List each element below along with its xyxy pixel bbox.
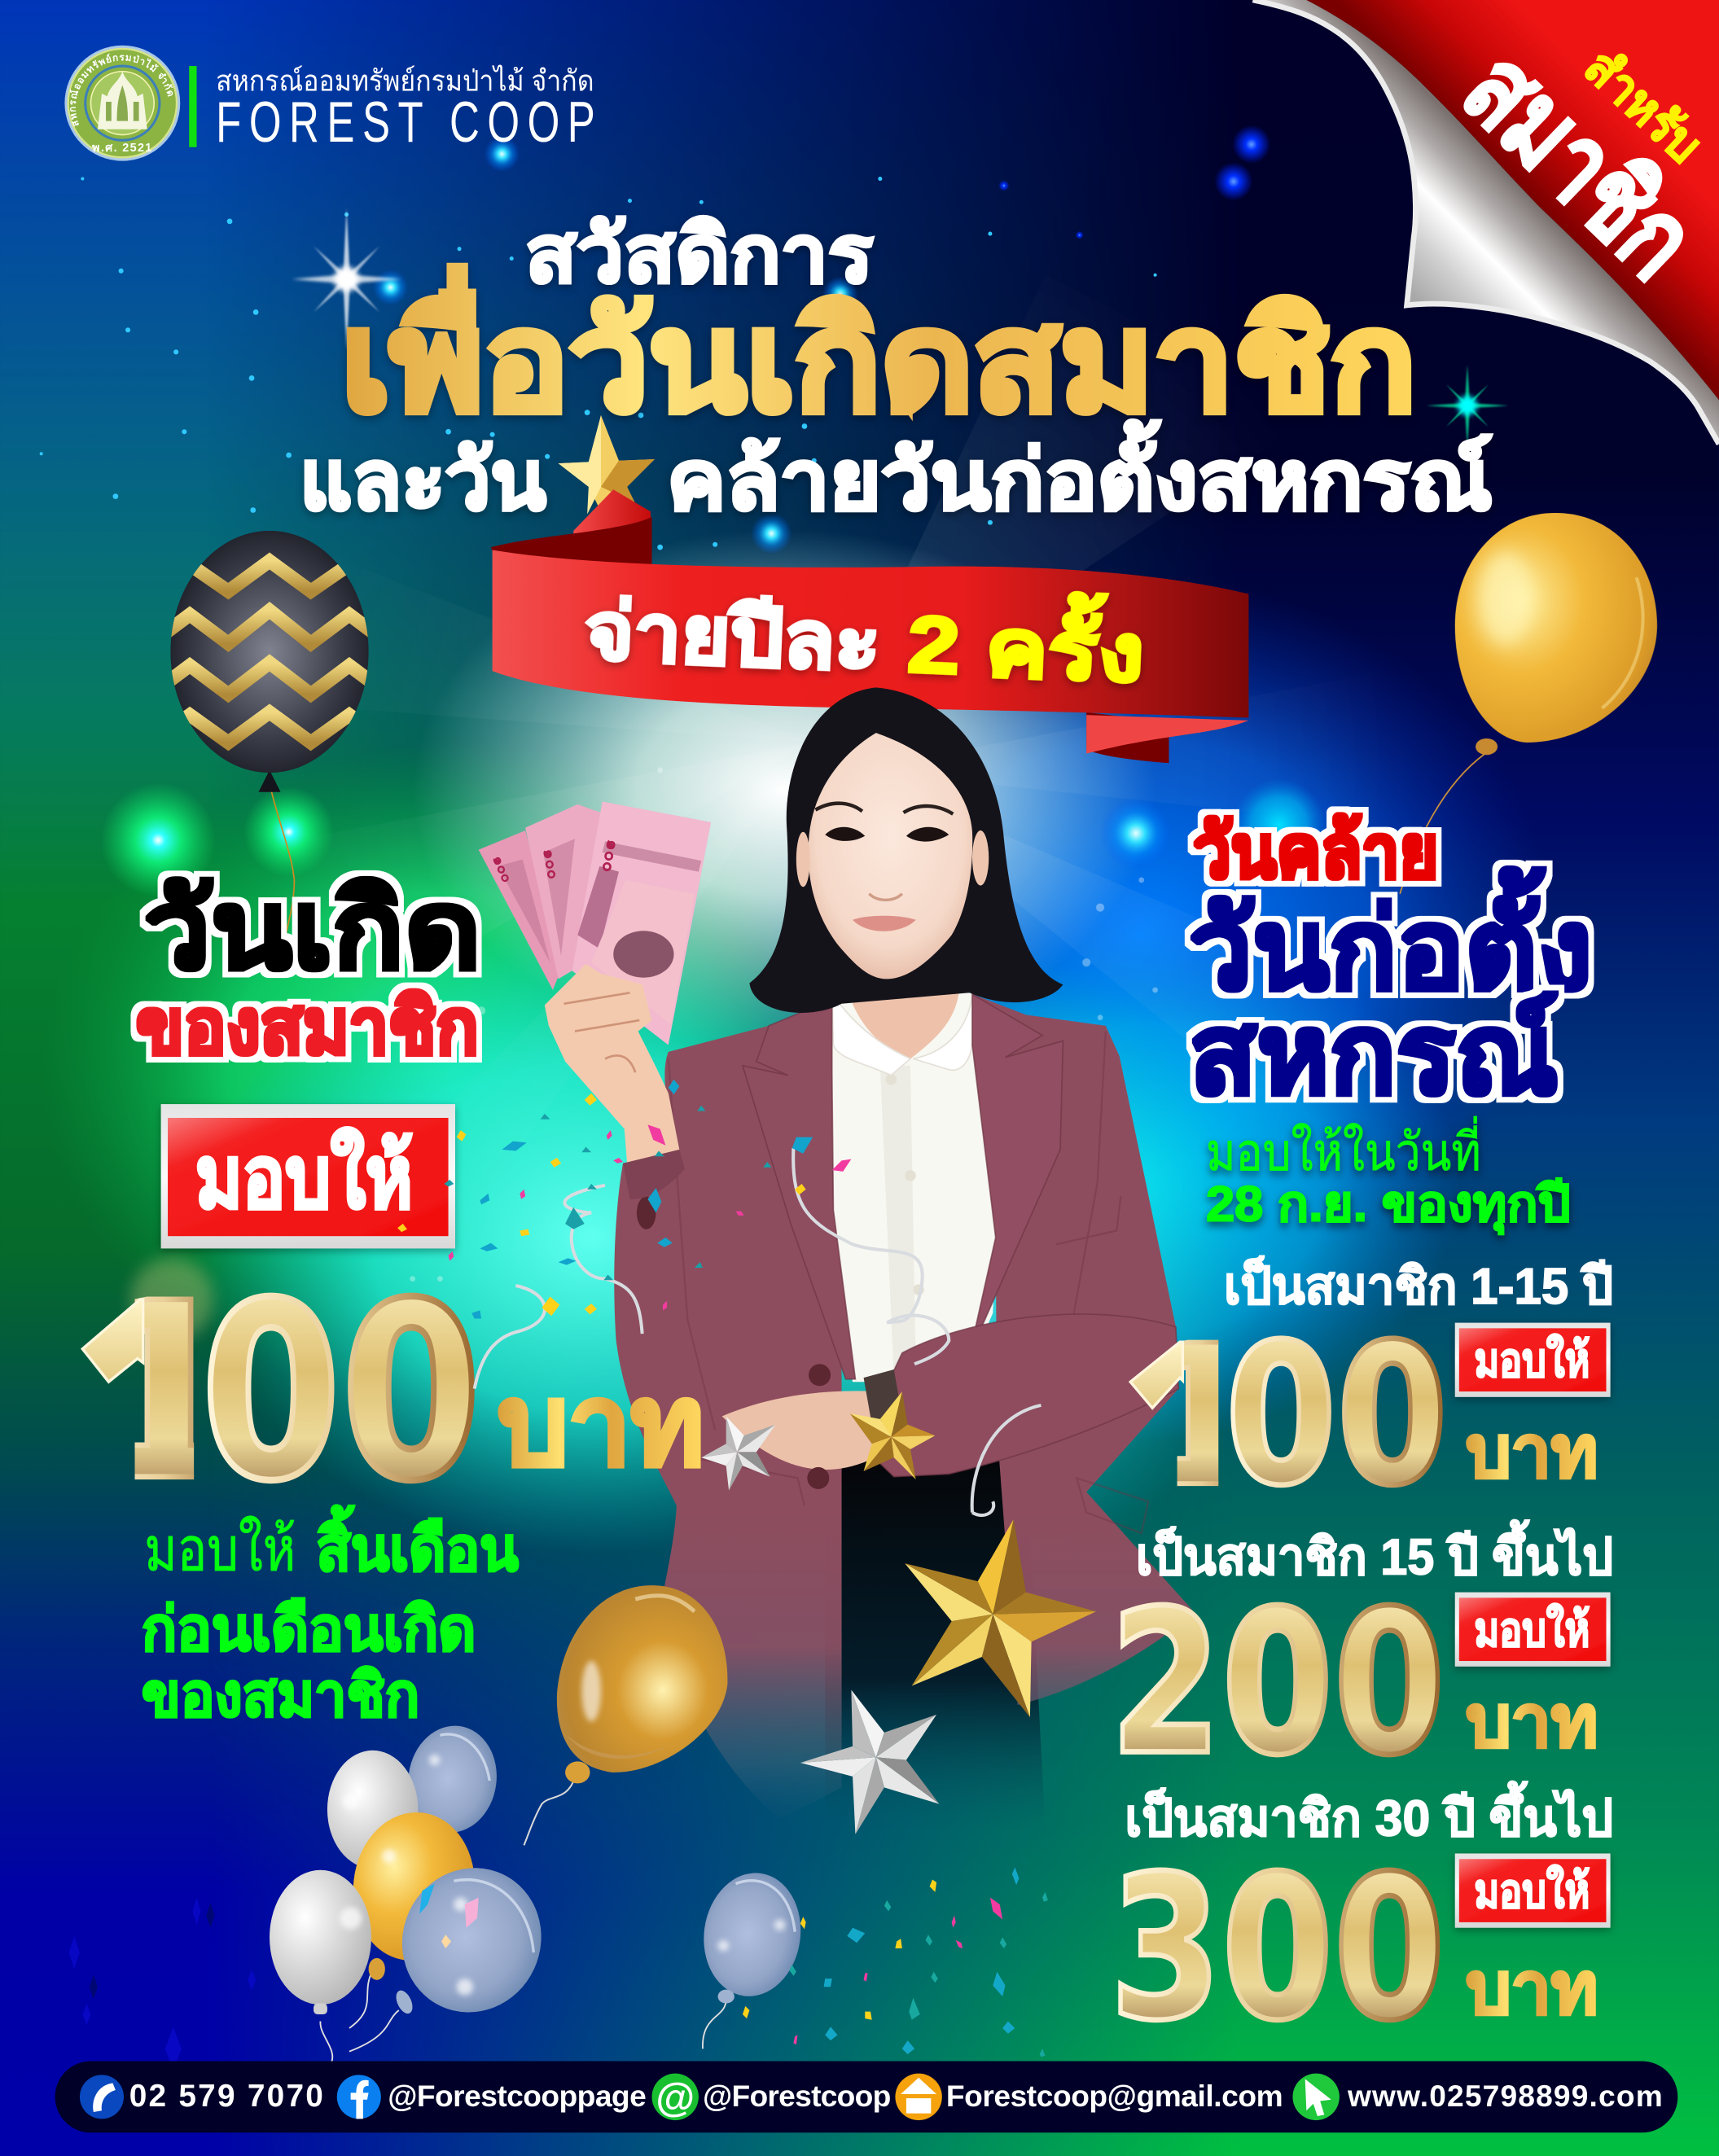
tier 2: 15+ years [1110, 1519, 1613, 1799]
title line 1: สวัสดิการ [525, 209, 873, 299]
starburst: white sparkle [280, 208, 413, 351]
page curl corner [1252, 0, 1719, 444]
tier 3: 30+ years: บาท [1466, 1948, 1598, 2028]
gold star: small on arm [850, 1391, 935, 1479]
tier 1 button [1455, 1323, 1611, 1397]
left note: ก่อนเดือนเกิด [142, 1596, 476, 1663]
title line 3 right: คล้ายวันก่อตั้งสหกรณ์ [667, 420, 1492, 527]
amount: 100 left [78, 1252, 481, 1535]
logo divider bar [189, 66, 197, 147]
contact: facebook: @Forestcooppage [388, 2079, 647, 2113]
tier 3: 30+ years: เป็นสมาชิก 30 ปี ขึ้นไป [1125, 1781, 1613, 1847]
woman holding banknotes [479, 687, 1194, 1829]
button: give [161, 1104, 455, 1248]
contact bar [55, 2061, 1677, 2132]
tier 2: 15+ years: เป็นสมาชิก 15 ปี ขึ้นไป [1136, 1519, 1613, 1586]
confetti around woman [397, 1080, 1041, 1515]
balloon cluster [270, 1720, 809, 2062]
logo: cooperative seal: พ.ศ. 2521 [92, 142, 153, 155]
gold star in title [559, 415, 655, 523]
balloon: large gold bottom [524, 1585, 727, 1845]
face [809, 733, 972, 979]
contact: phone: 02 579 7070 [129, 2079, 323, 2114]
left note [142, 1505, 519, 1729]
left note: มอบให้ [144, 1516, 296, 1584]
tier 3: 30+ years: 300 [1110, 1834, 1445, 2064]
ribbon banner [491, 489, 1248, 763]
jacket buttons [809, 1364, 831, 1386]
collar left [832, 993, 910, 1076]
ribbon text: จ่ายปีละ [583, 585, 882, 687]
right note: 28 ก.ย. ของทุกปี [1206, 1177, 1571, 1235]
title line 3 left: และวัน [300, 435, 546, 527]
icon: cursor [1292, 2074, 1340, 2120]
heading: of members: ของสมาชิก [136, 984, 479, 1071]
tier 1 amount 100: 1 [1134, 1304, 1268, 1530]
sleeve cuff button [637, 1196, 656, 1229]
title line 2: gold: เพื่อวันเกิดสมาชิก [341, 265, 1416, 439]
tier 2 button [1455, 1593, 1611, 1667]
button: give: มอบให้ [195, 1128, 413, 1226]
balloon: black and gold zigzag [170, 531, 369, 933]
ears [796, 830, 989, 887]
amount: 100 left: 00 [201, 1252, 481, 1535]
right forearm across body [860, 1314, 1178, 1477]
tier 3 button [1455, 1853, 1611, 1928]
banknotes: ๑๐๐ [598, 838, 624, 874]
tier 1 amount 100 [1129, 1335, 1443, 1488]
jacket body left [614, 1000, 842, 1819]
gold star: large [905, 1519, 1096, 1717]
banknotes: ๑๐๐ [489, 852, 516, 885]
collar right [913, 990, 972, 1070]
amount label: baht left: บาท [498, 1364, 704, 1489]
lapel left [743, 1000, 855, 1379]
tier 2: 15+ years: บาท [1466, 1682, 1598, 1762]
left note: สิ้นเดือน [316, 1505, 519, 1584]
logo: cooperative seal [64, 46, 181, 161]
left note: ของสมาชิก [142, 1662, 419, 1729]
confetti bottom [743, 1867, 1048, 2057]
amount: 100 left: 1 [78, 1252, 248, 1535]
heading: anniversary line 2: วันก่อตั้ง [1190, 867, 1593, 1013]
tier 2 button: มอบให้ [1474, 1602, 1590, 1656]
contact: email: Forestcoop@gmail.com [946, 2079, 1283, 2113]
raised hand [545, 964, 679, 1181]
heading: anniversary line 1: วันคล้าย [1194, 810, 1438, 893]
icon: phone [80, 2075, 124, 2119]
right heading [1190, 810, 1593, 1118]
ribbon text: 2 ครั้ง [906, 585, 1147, 699]
banknotes [479, 802, 711, 1045]
tier 1: 1-15 years: เป็นสมาชิก 1-15 ปี [1224, 1255, 1613, 1315]
tier 1 amount 100: 00 [1226, 1303, 1448, 1528]
ribbons [475, 1148, 1041, 1515]
banknotes: ๑๐๐ [539, 848, 562, 881]
tier 2: 15+ years: 200 [1110, 1568, 1445, 1799]
pants [825, 1430, 1045, 1829]
watch [864, 1369, 902, 1425]
tier 3: 30+ years [1110, 1781, 1613, 2064]
tier 3 button: มอบให้ [1474, 1864, 1590, 1917]
neck [843, 956, 960, 1058]
hand on arm [722, 1391, 894, 1470]
silver star: large [800, 1690, 939, 1834]
contact: line: @Forestcoop [703, 2079, 891, 2113]
starburst: teal sparkle [1424, 363, 1510, 449]
hair [749, 687, 1063, 1013]
icon: facebook [337, 2075, 381, 2119]
heading: birthday: วันเกิด [144, 869, 481, 992]
right note: มอบให้ในวันที่ [1206, 1116, 1481, 1181]
lapel right [970, 994, 1063, 1354]
ribbon text [583, 572, 1147, 699]
tier 1: 1-15 years [1129, 1255, 1614, 1488]
corner label: for members: สำหรับ [1574, 39, 1712, 173]
contact: website: www.025798899.com [1347, 2079, 1663, 2113]
jacket body right [972, 994, 1194, 1705]
right note [1206, 1116, 1571, 1235]
silver star: small on arm [701, 1416, 775, 1491]
logo: cooperative seal: สหกรณ์ออมทรัพย์กรมป่าไม้ จำกัด [70, 54, 173, 127]
jacket folds [669, 1032, 1148, 1533]
left heading [136, 869, 481, 1071]
balloon: gold top right [1400, 513, 1657, 894]
tier 1: 1-15 years: บาท [1466, 1413, 1598, 1492]
title block [300, 209, 1492, 527]
icon: home [895, 2074, 942, 2120]
icon: line at sign: @ [656, 2075, 695, 2119]
organisation name: FOREST COOP [216, 90, 595, 155]
cuff [623, 1150, 685, 1199]
organisation name: สหกรณ์ออมทรัพย์กรมป่าไม้ จำกัด [216, 64, 594, 97]
tier 1 button: มอบให้ [1474, 1333, 1590, 1387]
heading: anniversary line 3: สหกรณ์ [1190, 993, 1558, 1118]
facial features [815, 804, 953, 931]
shirt [832, 993, 996, 1382]
glow sparkles [40, 125, 1357, 2071]
